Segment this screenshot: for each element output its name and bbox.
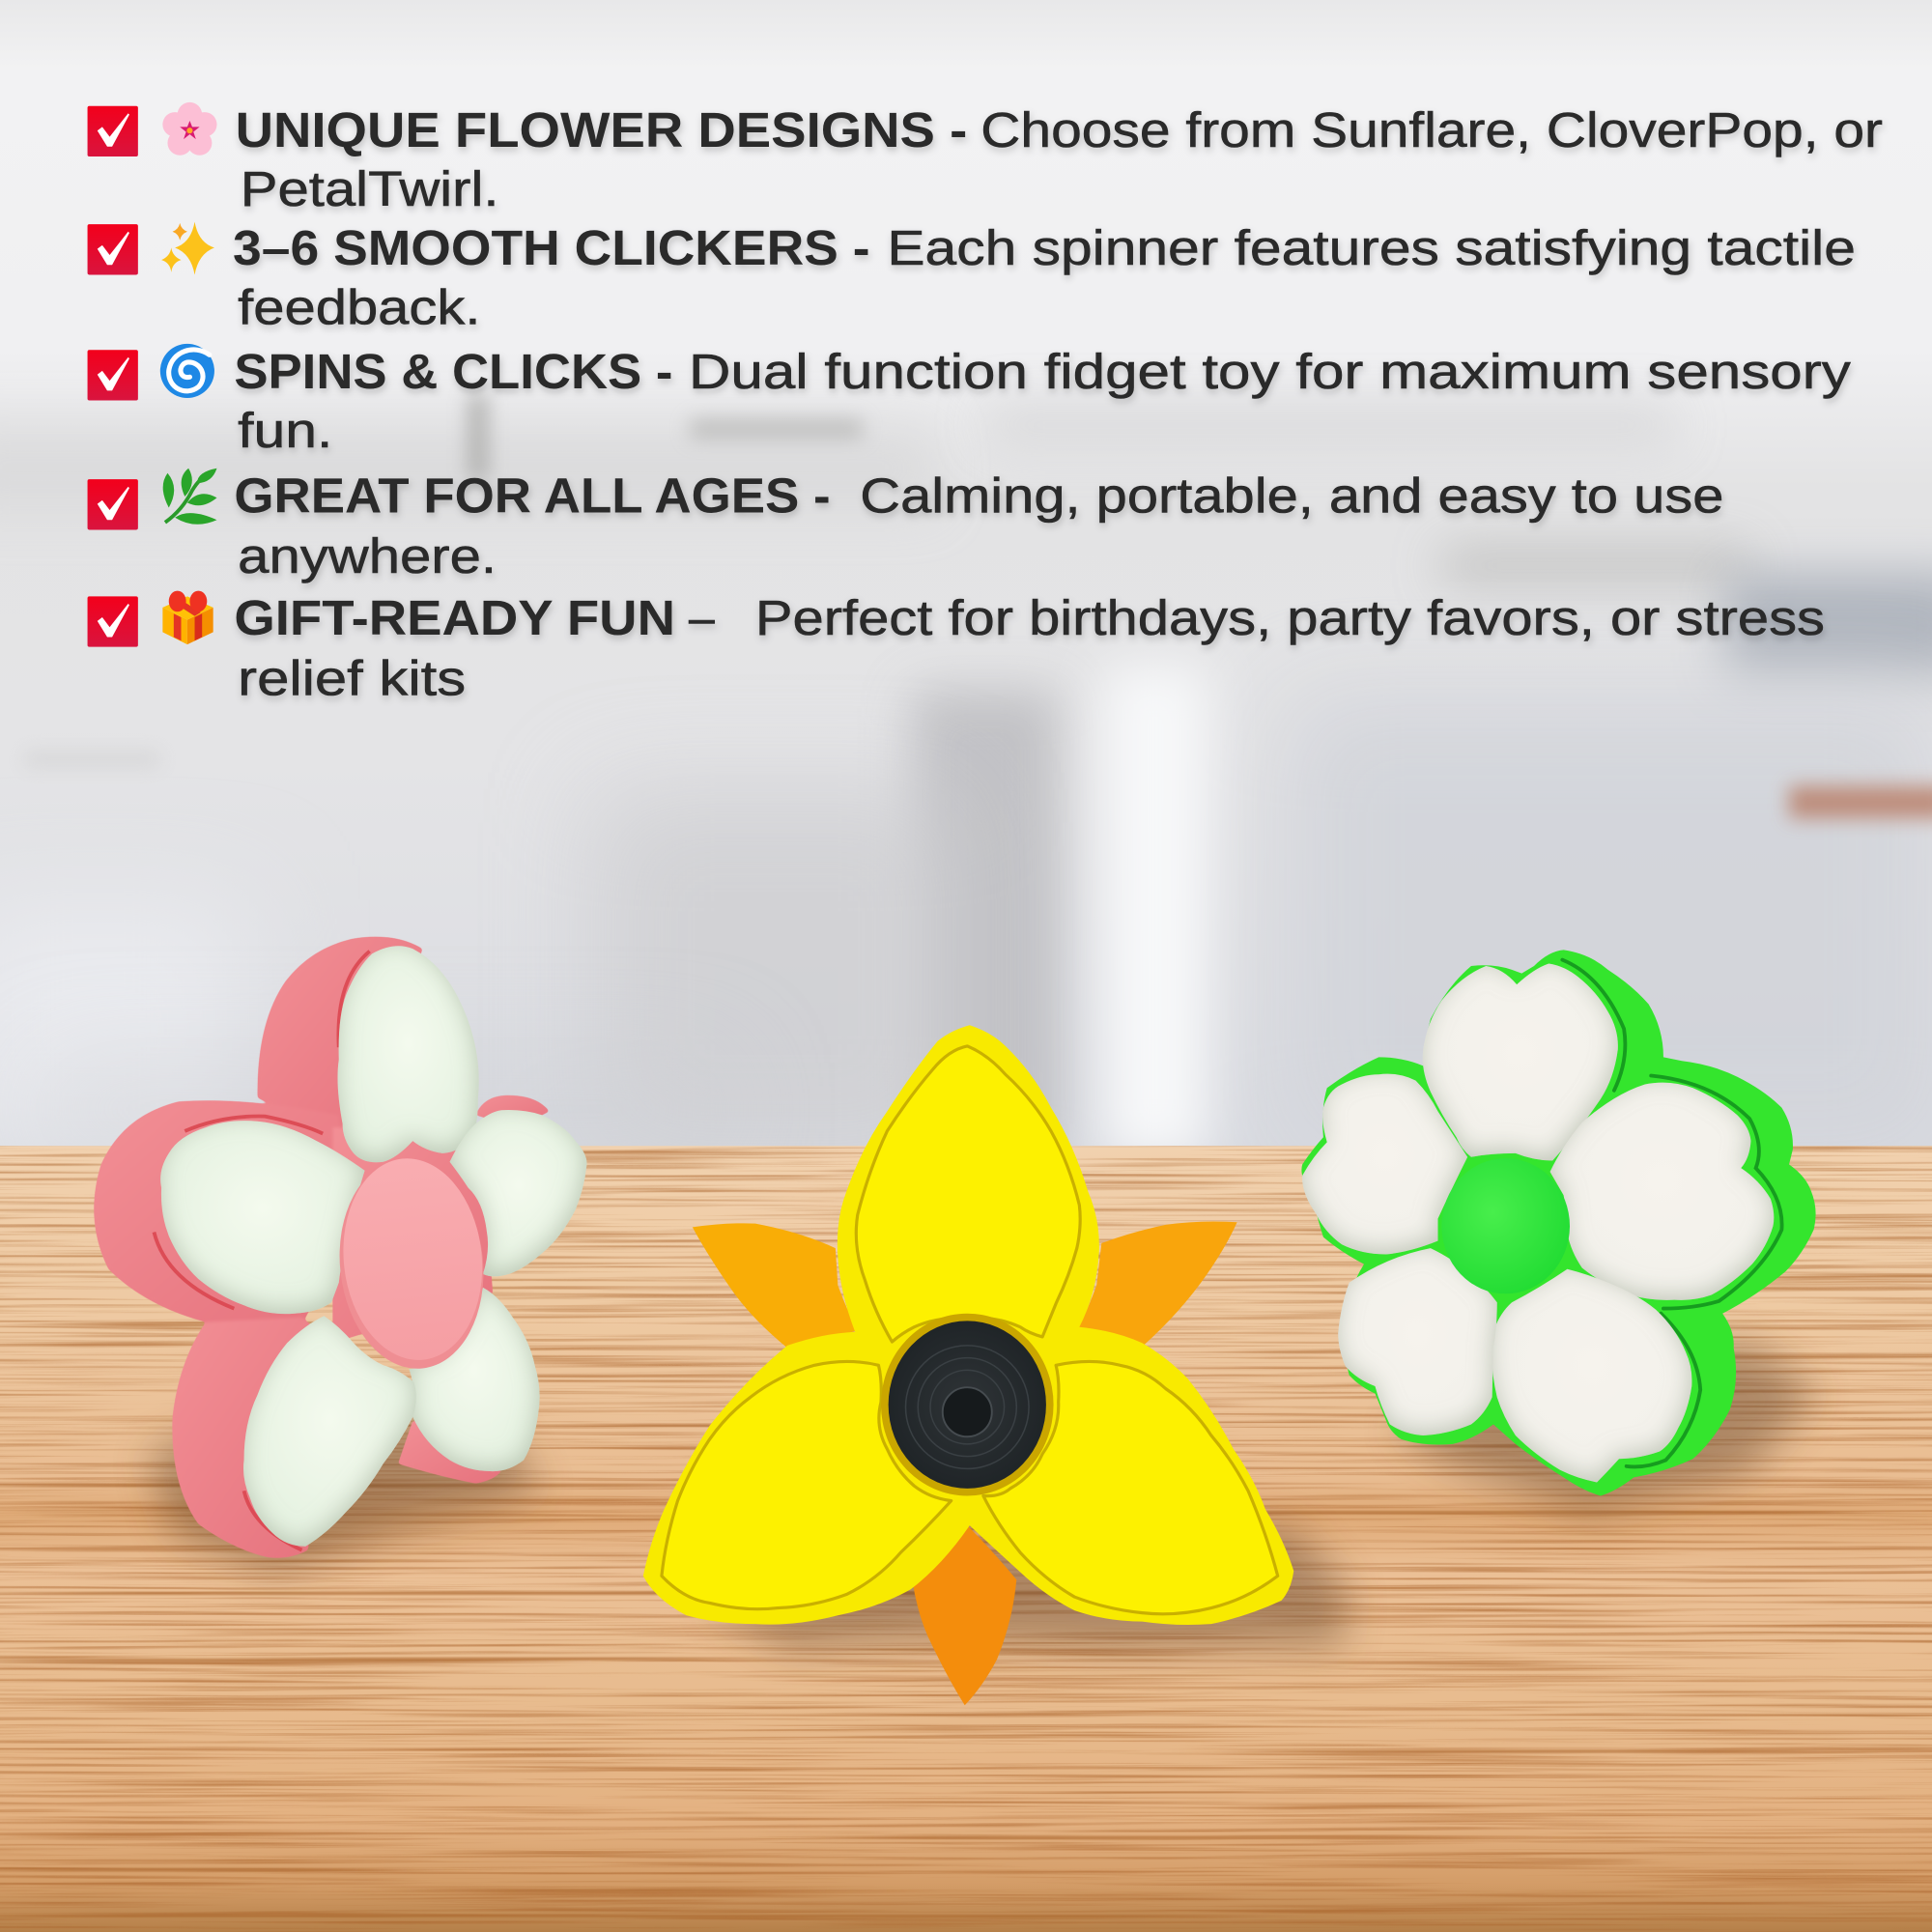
feature 1: unique flower designs (88, 102, 1883, 216)
pink hub (329, 1151, 494, 1376)
icon: herb (163, 469, 216, 525)
text: great for all ages: Calming, portable, and easy to use (860, 469, 1723, 524)
petal face: right (983, 1361, 1278, 1614)
red checkbox (88, 596, 138, 647)
red groove lines (154, 952, 370, 1550)
petal: right (1550, 1083, 1774, 1300)
petal face: top (856, 1046, 1080, 1342)
petal: lower left (1338, 1248, 1497, 1435)
black center knob (881, 1314, 1054, 1495)
pink extruded sides (94, 937, 550, 1558)
yellow petal faces (662, 1046, 1278, 1614)
orange sepals (693, 1221, 1237, 1705)
text: great for all ages (234, 469, 1723, 583)
pink flower spinner (94, 937, 587, 1558)
wooden tabletop (0, 1146, 1932, 1932)
text: great for all ages: anywhere. (238, 528, 497, 583)
text: unique flower designs: PetalTwirl. (241, 161, 499, 216)
icon: gift (162, 591, 213, 644)
feature 4: great for all ages (88, 469, 1723, 583)
white petals (160, 946, 587, 1471)
petal: top (337, 946, 479, 1162)
text: spins and clicks: SPINS & CLICKS - (234, 344, 672, 399)
yellow flower spinner (643, 1025, 1293, 1705)
text: unique flower designs: Choose from Sunflare, CloverPop, or (980, 102, 1883, 157)
feature 5: gift-ready fun (88, 590, 1825, 705)
icon: sparkles (161, 222, 214, 274)
text: smooth clickers: 3–6 SMOOTH CLICKERS - (233, 220, 870, 275)
red checkbox (88, 224, 138, 274)
petal: left (1302, 1074, 1467, 1254)
petal face: left (662, 1361, 952, 1609)
petal: lower left (243, 1316, 416, 1547)
icon: cherry blossom (162, 102, 216, 156)
text: smooth clickers (233, 220, 1856, 334)
text: spins and clicks (234, 344, 1851, 458)
text: gift-ready fun: – (689, 590, 715, 645)
petal: lower right (409, 1288, 540, 1471)
text: smooth clickers: feedback. (238, 279, 480, 334)
text: great for all ages: GREAT FOR ALL AGES - (234, 469, 831, 524)
feature list (88, 102, 1883, 705)
icon: spiral (160, 344, 214, 398)
cast shadows on table (148, 1343, 1817, 1649)
text: spins and clicks: Dual function fidget toy for maximum sensory (689, 344, 1851, 399)
green hub (1441, 1158, 1570, 1293)
dark green grooves (1562, 960, 1782, 1466)
text: gift-ready fun (234, 590, 1825, 705)
text: unique flower designs: UNIQUE FLOWER DESIGNS - (236, 102, 967, 157)
text: gift-ready fun: Perfect for birthdays, party favors, or stress (755, 590, 1825, 645)
text: gift-ready fun: relief kits (238, 650, 466, 705)
white petals (1302, 963, 1774, 1482)
red checkbox (88, 106, 138, 156)
text: smooth clickers: Each spinner features satisfying tactile (887, 220, 1856, 275)
text: gift-ready fun: GIFT-READY FUN (234, 590, 675, 645)
blurred room background (0, 0, 1932, 1158)
text: spins and clicks: fun. (238, 403, 332, 458)
petal: right (450, 1110, 587, 1276)
text: unique flower designs (236, 102, 1883, 216)
green flower spinner (1301, 950, 1816, 1495)
petal: top (1423, 963, 1618, 1161)
yellow body (643, 1025, 1293, 1625)
red checkbox (88, 479, 138, 529)
petal: left (160, 1121, 365, 1314)
green body (1301, 950, 1816, 1495)
petal: lower right (1492, 1269, 1691, 1482)
feature 3: spins and clicks (88, 344, 1851, 458)
red checkbox (88, 350, 138, 401)
feature 2: smooth clickers (88, 220, 1856, 334)
